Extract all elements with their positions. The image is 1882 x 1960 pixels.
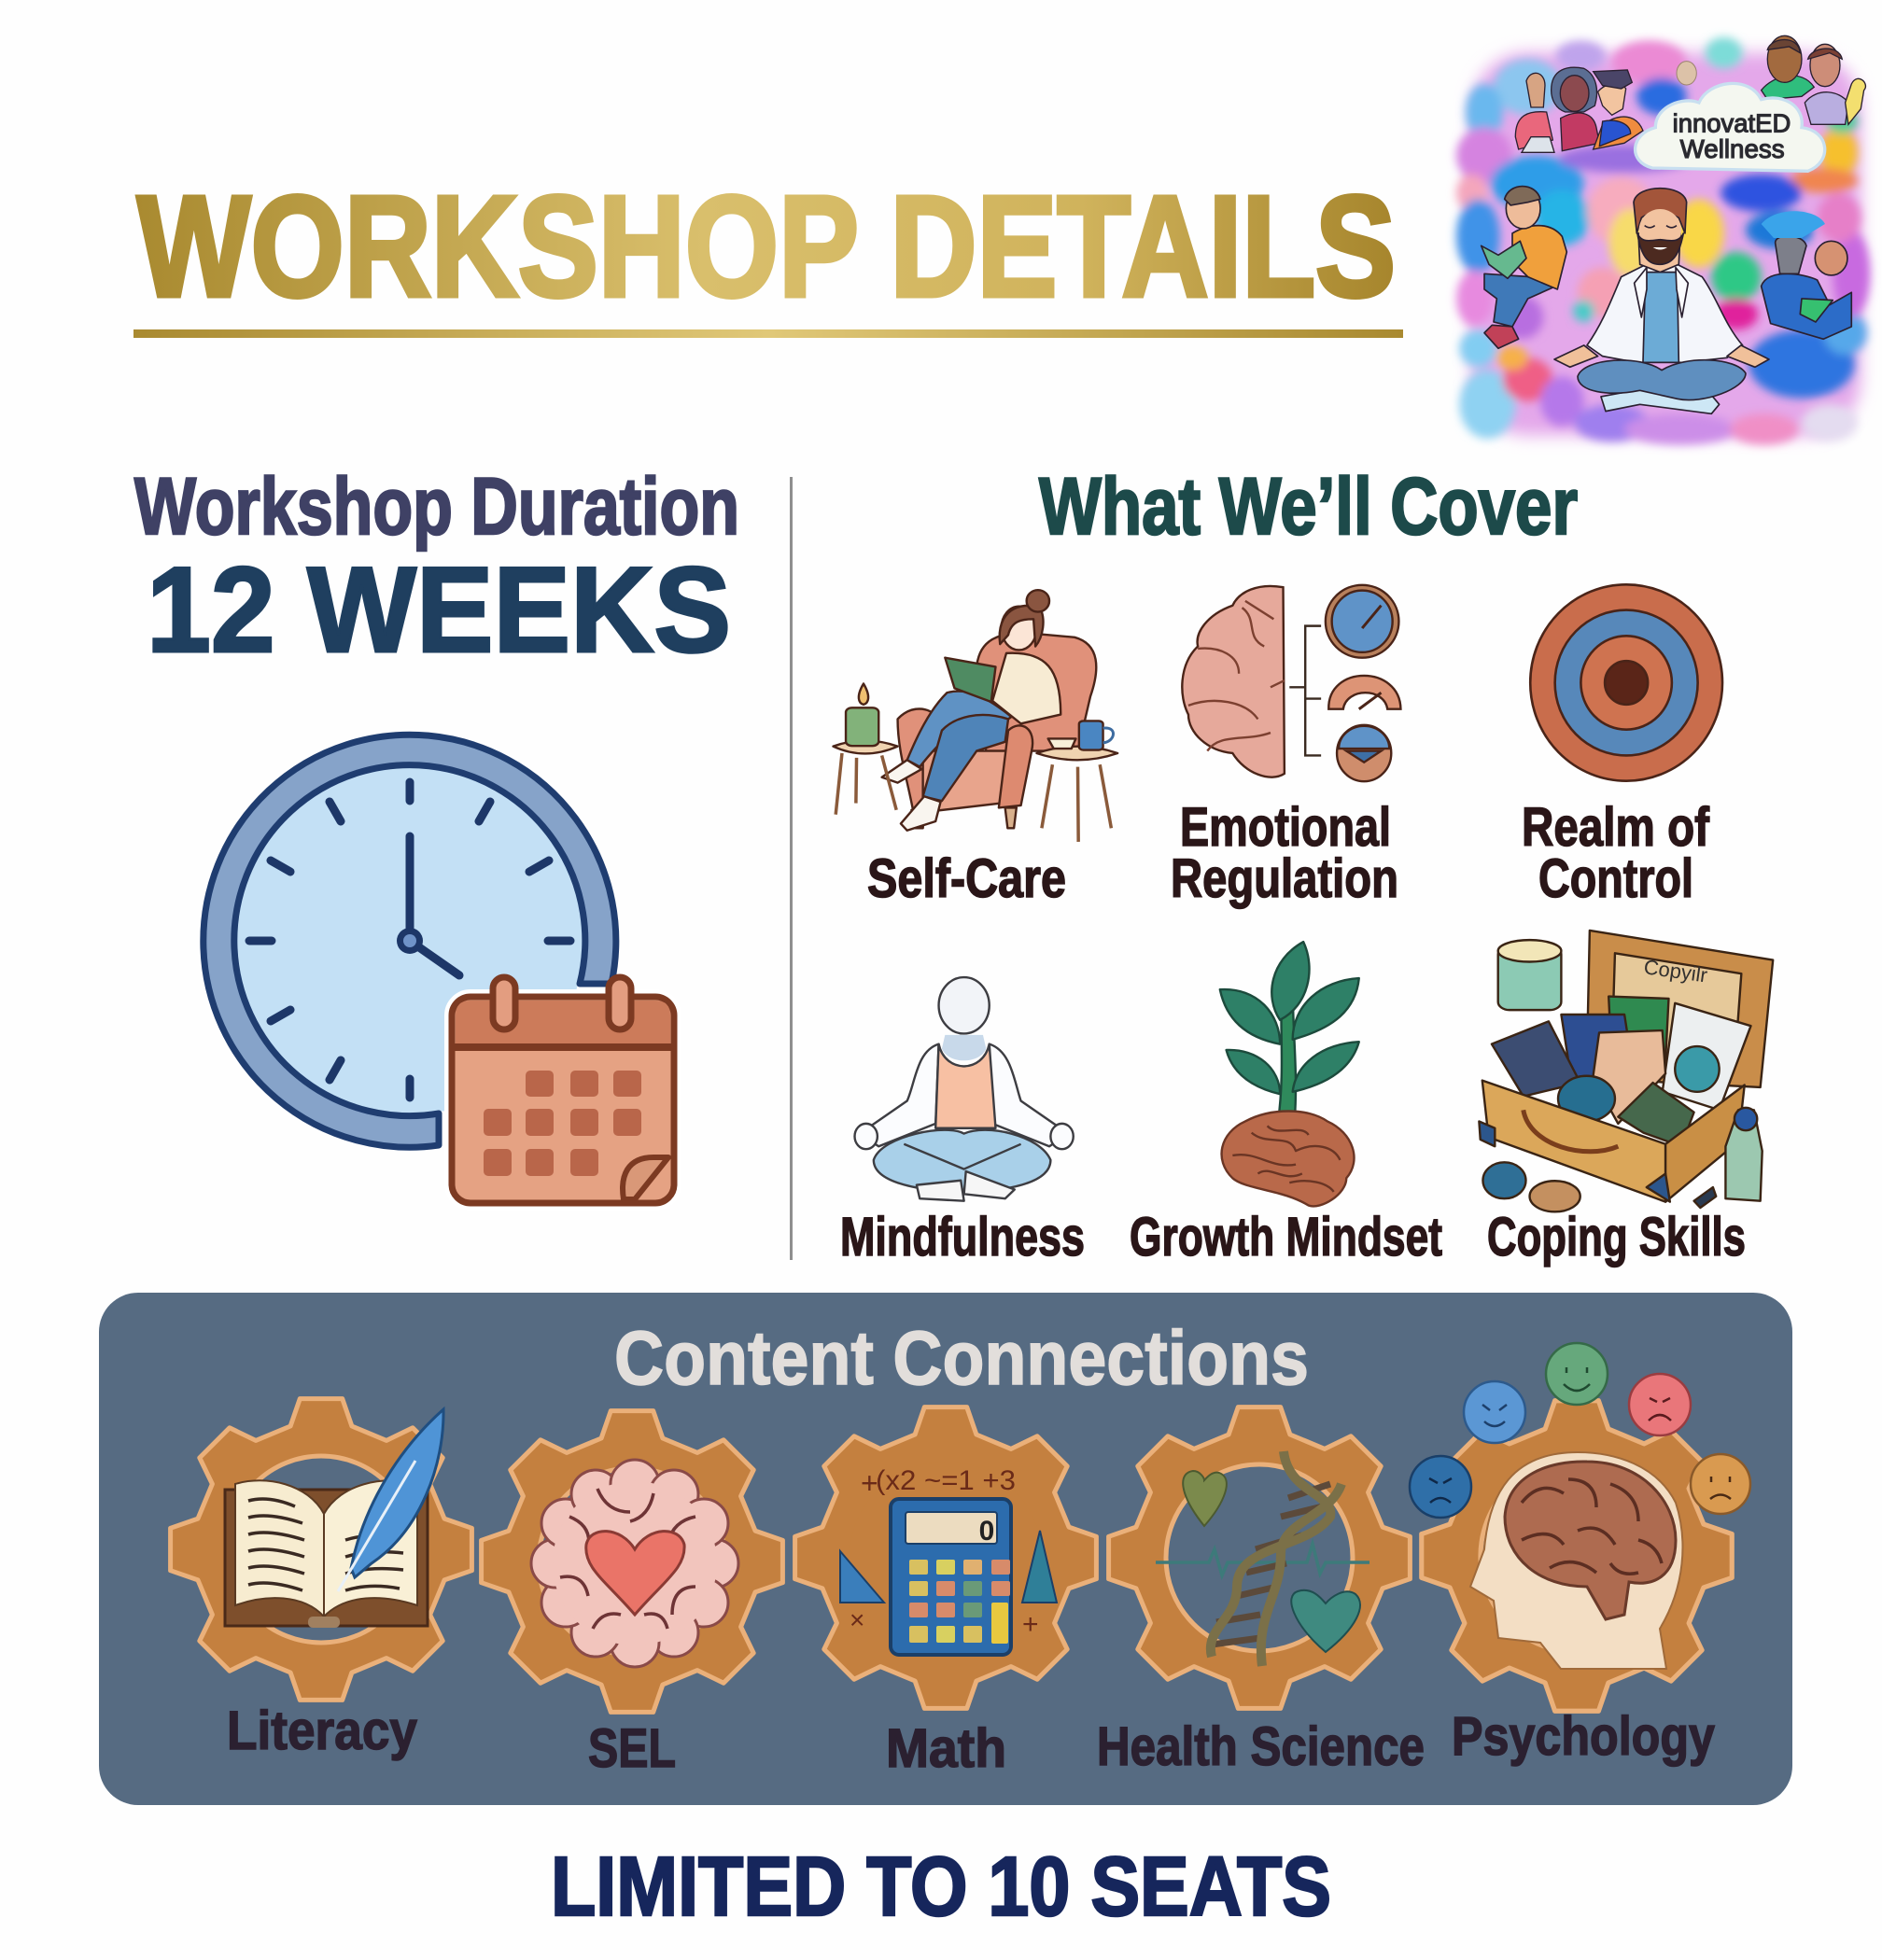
panel heading: Content Connections — [614, 1316, 1309, 1401]
logo: innovatED Wellness — [1456, 35, 1870, 445]
gear: literacy — [171, 1399, 471, 1700]
heading: workshop duration: Workshop Duration — [134, 462, 739, 552]
gear: SEL — [482, 1411, 782, 1712]
label: self-care: Self-Care — [867, 848, 1066, 909]
logo: meditating man — [1554, 189, 1769, 413]
label: SEL: SEL — [588, 1718, 676, 1779]
gear: math — [795, 1407, 1096, 1708]
duration value: 12 WEEKS — [147, 541, 731, 678]
label: psychology: Psychology — [1452, 1706, 1715, 1767]
label: literacy: Literacy — [227, 1701, 417, 1761]
panel: content connections — [99, 1293, 1792, 1805]
icon: mindfulness — [855, 977, 1074, 1201]
label: emotional regulation: Emotional — [1180, 797, 1391, 858]
logo: people top right — [1762, 35, 1865, 124]
logo text: innovatED — [1673, 109, 1791, 138]
footer callout: LIMITED TO 10 SEATS — [551, 1841, 1331, 1934]
icon: self-care — [833, 590, 1117, 842]
logo: reader left — [1482, 187, 1566, 348]
heading: what we'll cover: What We’ll Cover — [1039, 462, 1578, 552]
icon: emotional regulation — [1182, 585, 1400, 781]
gear: math: (x2 ~=1 +3 — [876, 1465, 1016, 1496]
gear: math: × — [850, 1605, 864, 1634]
label: mindfulness: Mindfulness — [840, 1207, 1085, 1267]
label: health science: Health Science — [1097, 1716, 1425, 1777]
logo: readers right — [1762, 211, 1851, 339]
label: emotional regulation: Regulation — [1171, 848, 1398, 909]
label: realm of control: Control — [1538, 848, 1693, 909]
icon: realm of control target — [1530, 584, 1722, 781]
gear: math: 0 — [979, 1516, 994, 1547]
label: realm of control: Realm of — [1522, 797, 1710, 858]
emoji bubbles — [1410, 1343, 1750, 1518]
title underline — [133, 329, 1403, 338]
label: coping skills: Coping Skills — [1487, 1207, 1746, 1267]
icon: calendar — [452, 977, 674, 1203]
logo text — [1673, 109, 1791, 163]
gear: health science — [1109, 1407, 1410, 1708]
logo text: Wellness — [1680, 134, 1785, 163]
label: math: Math — [886, 1718, 1006, 1779]
divider — [790, 477, 793, 1260]
logo watercolor background — [1456, 37, 1870, 445]
gear: math: + — [1022, 1609, 1039, 1640]
panel: what we'll cover icons — [833, 584, 1773, 1211]
label: growth mindset: Growth Mindset — [1130, 1207, 1442, 1267]
logo: people top left — [1515, 67, 1643, 152]
label: realm of control — [1522, 797, 1710, 909]
icon: coping skills toolkit — [1479, 931, 1773, 1211]
icon: growth mindset — [1220, 942, 1359, 1206]
icon: clock — [204, 735, 616, 1147]
gear: math: + — [861, 1466, 878, 1500]
label: emotional regulation — [1171, 797, 1398, 909]
logo: cloud with brand name — [1636, 83, 1825, 171]
logo: light bulb — [1677, 62, 1696, 85]
toolkit lid scribble: Copyilr — [1642, 955, 1709, 987]
title: WORKSHOP DETAILS — [137, 166, 1396, 327]
gear: psychology — [1410, 1343, 1750, 1711]
